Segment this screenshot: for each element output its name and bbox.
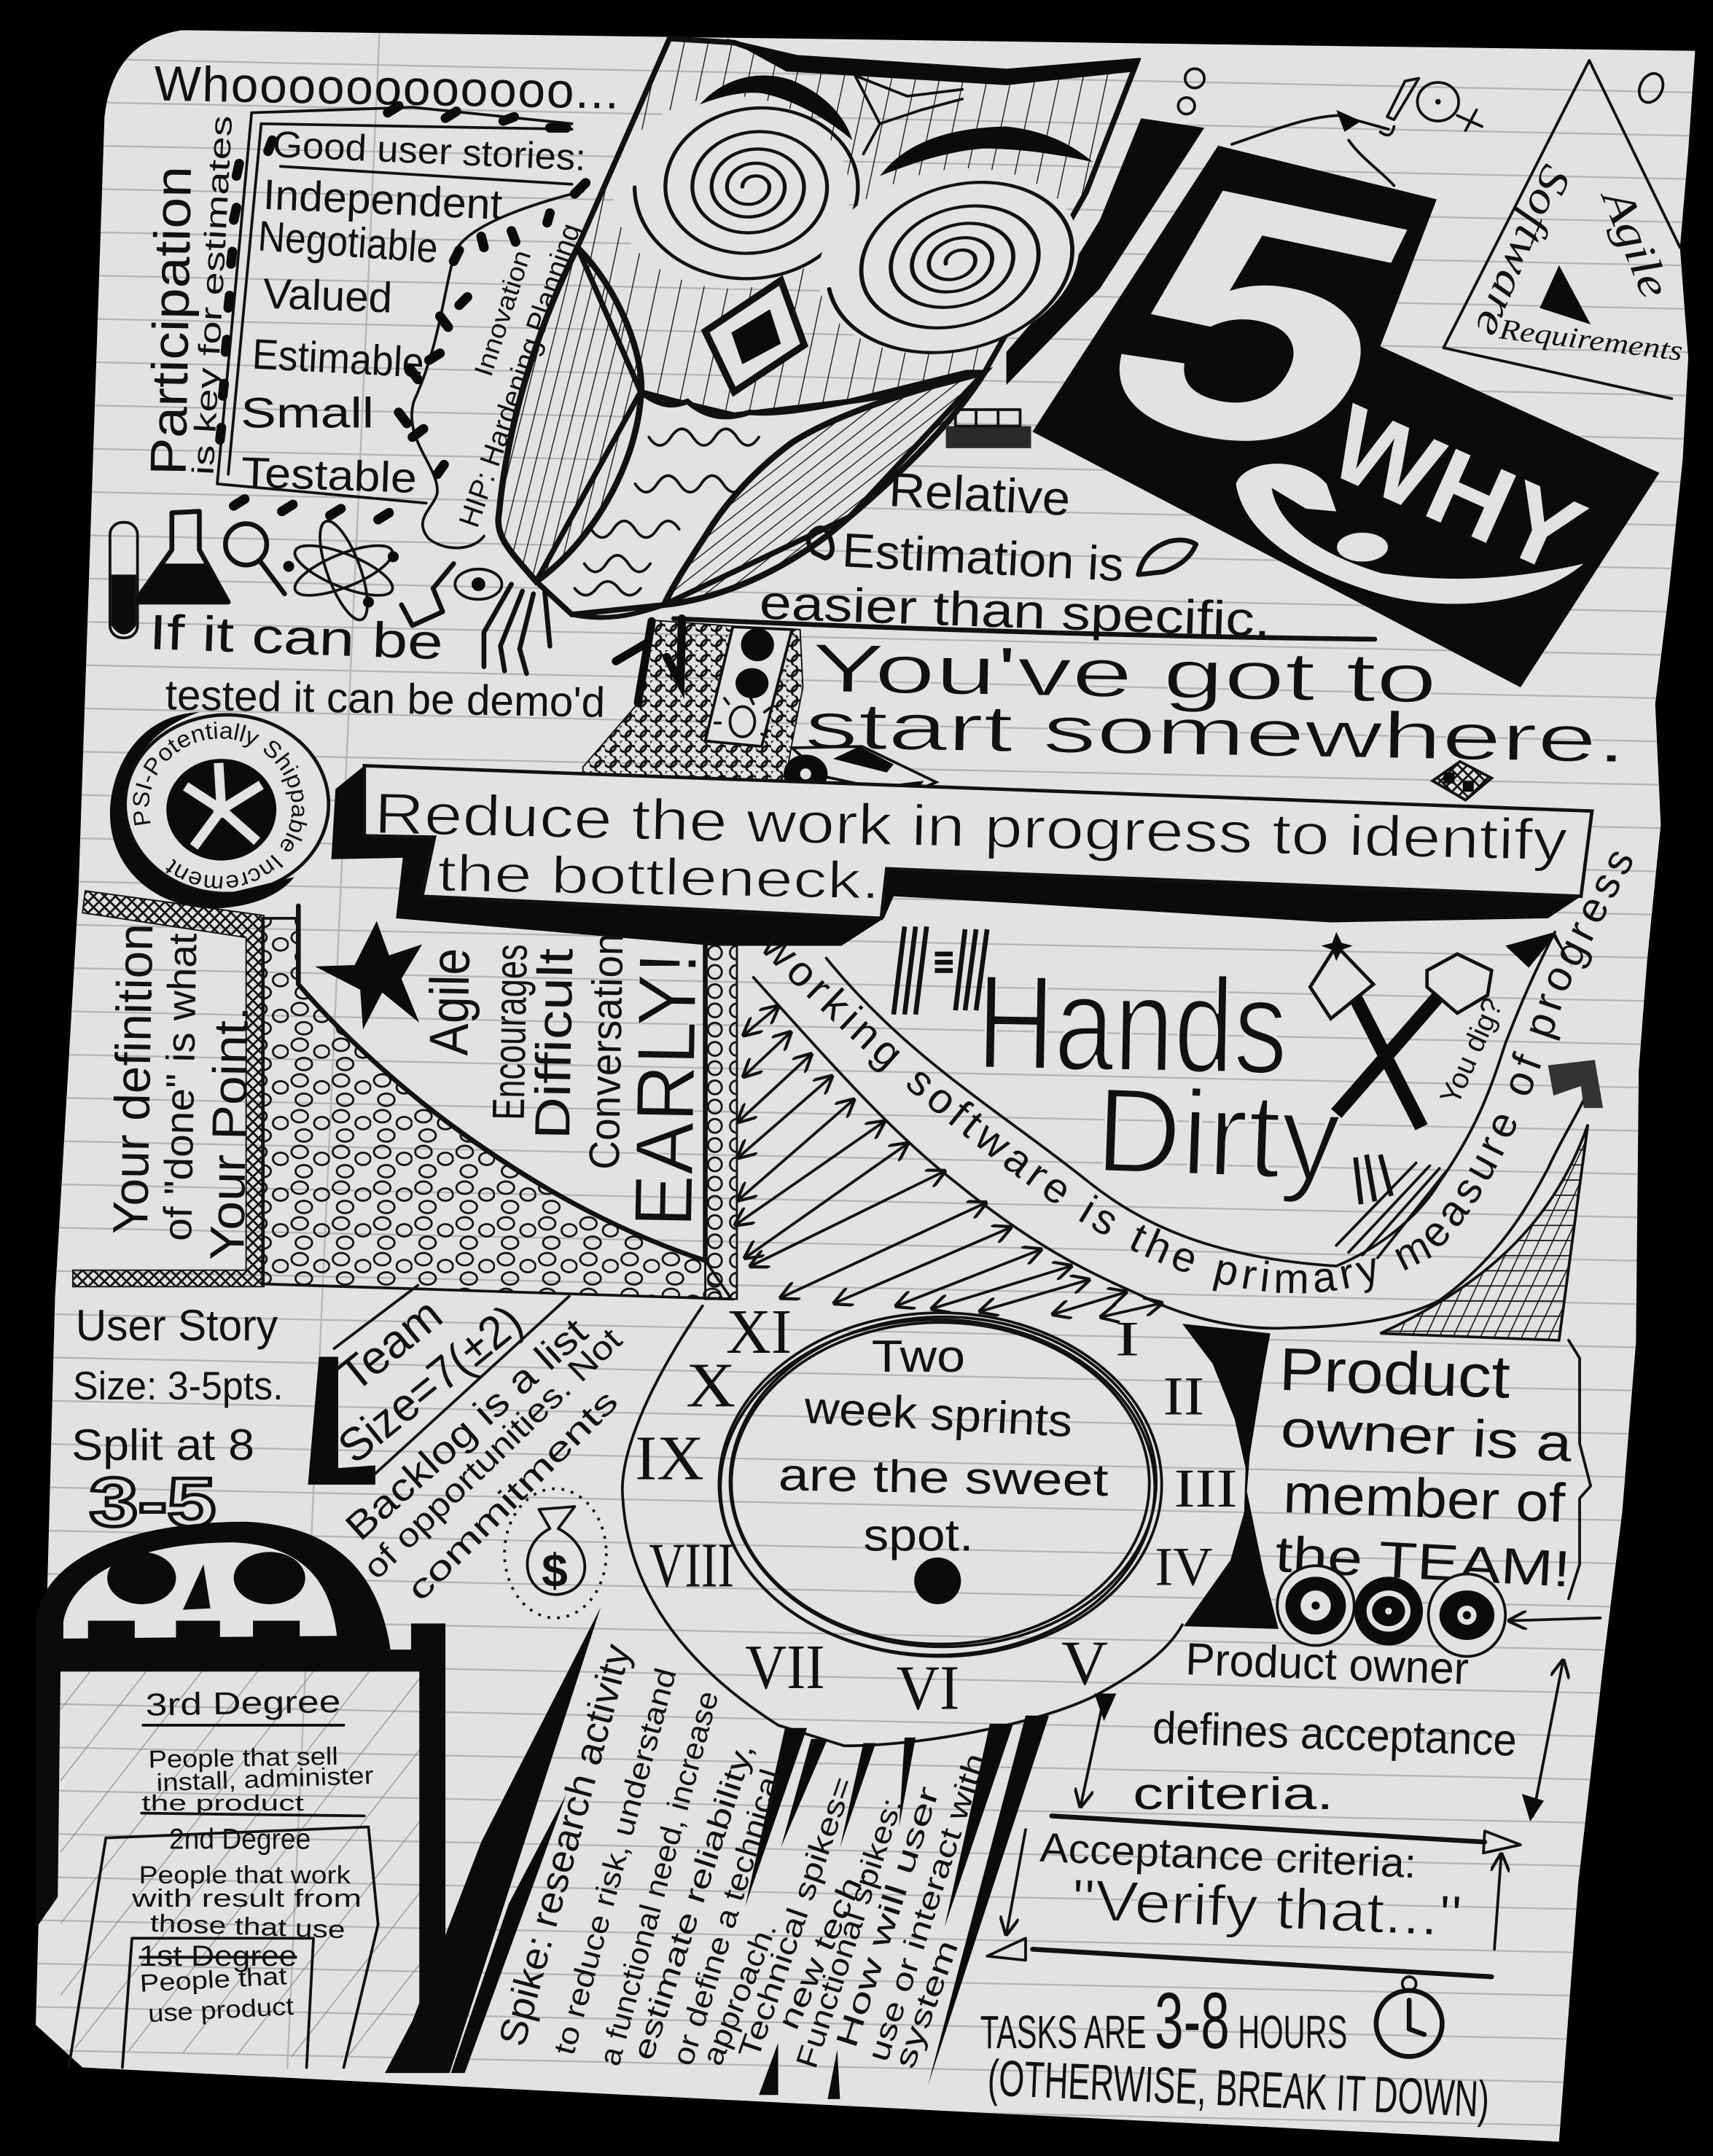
skull teeth bbox=[88, 1621, 135, 1655]
list: INVEST: Small bbox=[241, 390, 374, 437]
roman numerals: IV bbox=[1155, 1537, 1212, 1598]
owl chest bbox=[536, 372, 984, 614]
roman numerals: X bbox=[686, 1350, 735, 1420]
triangle: agile software requirements: Software bbox=[1465, 158, 1581, 344]
black shape bbox=[1032, 146, 1659, 687]
panel: definition of done: Your Point. bbox=[200, 1006, 258, 1261]
white swoosh bbox=[1236, 464, 1584, 604]
tomb walls bbox=[36, 1615, 445, 2045]
arrow head top bbox=[1505, 932, 1573, 968]
banner shadow bbox=[332, 766, 1581, 946]
box: acceptance criteria bbox=[987, 1816, 1521, 1977]
curve lower line bbox=[754, 977, 1585, 1328]
text: backlog: of opportunities. Not bbox=[356, 1321, 629, 1586]
icon: traffic light bbox=[706, 627, 792, 746]
text: hands dirty: Hands bbox=[975, 947, 1289, 1103]
text: product owner defines acceptance: criteria. bbox=[1133, 1769, 1333, 1819]
panel: skull and tombstone degrees: those that use bbox=[149, 1910, 346, 1944]
list: INVEST: Independent bbox=[262, 171, 503, 229]
text: participation is key for estimates: Participation bbox=[140, 165, 202, 476]
clock text bbox=[778, 1332, 1109, 1561]
icon: small clock bbox=[1376, 1977, 1442, 2056]
third degree: 3rd Degree bbox=[145, 1684, 341, 1723]
double headed arrow field bbox=[735, 1007, 1162, 1317]
panel: skull and tombstone degrees: People that work bbox=[139, 1862, 351, 1889]
list: INVEST bbox=[241, 171, 503, 502]
tomb interior hatch bbox=[61, 1671, 421, 2062]
definition of done text: Your definition bbox=[104, 923, 163, 1235]
text: spike definition: or define a technical bbox=[665, 1765, 788, 2069]
clock dot bbox=[914, 1558, 961, 1604]
text: tasks are 3-8 hours: TASKS ARE 3-8 HOURS bbox=[980, 1977, 1347, 2066]
tyre black crescent bbox=[110, 712, 294, 909]
list: INVEST: Estimable bbox=[251, 331, 425, 387]
heading: good user stories: Good user stories: bbox=[272, 123, 587, 179]
panel: skull and tombstone degrees: install, administer bbox=[156, 1762, 374, 1797]
list: INVEST: Negotiable bbox=[257, 212, 440, 272]
text: spike definition: new tech. bbox=[770, 1861, 873, 2034]
text: tasks are 3-8 hours bbox=[980, 1977, 1491, 2128]
text: product owner defines acceptance bbox=[1133, 1634, 1518, 1819]
box: acceptance criteria: Acceptance criteria: bbox=[1039, 1824, 1417, 1886]
owl eyebrows bbox=[700, 76, 852, 140]
text: spike definition: to reduce risk, understand bbox=[547, 1664, 683, 2058]
text: backlog bbox=[337, 1310, 629, 1608]
skull dome bbox=[36, 1522, 391, 1657]
icon: checkered flag bbox=[1432, 762, 1491, 800]
crosshatch border bbox=[73, 891, 264, 1286]
large 5: 5 bbox=[1047, 113, 1472, 528]
small face and toes bbox=[1336, 532, 1389, 562]
vine frame bbox=[217, 107, 572, 503]
owl left eye bbox=[613, 96, 858, 289]
clock text: are the sweet bbox=[778, 1450, 1109, 1506]
text: if it can be tested: If it can be bbox=[148, 605, 444, 670]
curved statement: working software is the primary measure of progress bbox=[763, 851, 1633, 1293]
panel: skull and tombstone degrees: 2nd Degree bbox=[169, 1824, 311, 1856]
text: user story size: Size: 3-5pts. bbox=[73, 1363, 284, 1408]
panel: skull and tombstone degrees: People that sell bbox=[148, 1743, 338, 1773]
roman numerals: II bbox=[1163, 1367, 1204, 1427]
owl beak bbox=[706, 281, 804, 392]
text: user story size: User Story bbox=[76, 1300, 278, 1350]
panel: definition of done: of "done" is what bbox=[155, 933, 206, 1241]
icon: money bag: $ bbox=[542, 1544, 568, 1596]
slanted strokes bbox=[1336, 1163, 1446, 1258]
vine: HIP hardening innovation planning bbox=[399, 183, 587, 548]
label: 3-5 outlined: 3-5 bbox=[90, 1464, 216, 1540]
clock text: Two bbox=[872, 1332, 965, 1382]
vine: HIP hardening innovation planning: HIP: Hardening Planning bbox=[453, 219, 587, 531]
text: spike definition: system bbox=[887, 1935, 964, 2072]
text: backlog: Backlog is a list bbox=[337, 1310, 596, 1549]
text: product owner member: owner is a bbox=[1279, 1399, 1574, 1473]
roman numerals: VIII bbox=[649, 1530, 734, 1600]
text: participation is key for estimates: is key for estimates bbox=[185, 114, 238, 476]
text: if it can be tested: tested it can be demo'd bbox=[165, 671, 606, 727]
text: product owner member: the TEAM! bbox=[1274, 1526, 1572, 1598]
skull eyes and nose bbox=[107, 1552, 176, 1604]
icons: science lab bbox=[110, 512, 399, 638]
roman numerals: V bbox=[1061, 1628, 1108, 1698]
owl left wing bbox=[499, 247, 641, 582]
owl right talon bbox=[616, 619, 682, 703]
divider column of bubbles bbox=[706, 945, 737, 1299]
text: relative estimation bbox=[759, 462, 1271, 647]
panel: agile encourages difficult conversation: Encourages bbox=[484, 944, 537, 1120]
clock inner ring bbox=[719, 1313, 1162, 1657]
text: relative estimation: Estimation is bbox=[841, 523, 1125, 591]
arrow head lower bbox=[1548, 1060, 1603, 1108]
vine: HIP hardening innovation planning: Innovation bbox=[469, 246, 536, 380]
text: spike definition: Technical spikes= bbox=[731, 1772, 860, 2063]
text: hands dirty: Dirty bbox=[1093, 1063, 1343, 1206]
panel: definition of done bbox=[73, 891, 264, 1286]
text: spike definition: use or interact with bbox=[860, 1749, 992, 2066]
scribble column bbox=[583, 620, 803, 790]
panel: skull and tombstone degrees: People that bbox=[139, 1962, 288, 1998]
panel: working software curve bbox=[733, 851, 1633, 1342]
text: backlog: commitments bbox=[399, 1383, 625, 1608]
text: relative estimation: Relative bbox=[888, 462, 1072, 526]
roman numerals: VII bbox=[745, 1632, 825, 1702]
panel: skull and tombstone degrees: use product bbox=[147, 1993, 294, 2028]
icon: hook and eye bbox=[402, 563, 502, 625]
banner: reduce work in progress bbox=[332, 766, 1592, 946]
panel: skull and tombstone degrees: with result from bbox=[131, 1885, 362, 1913]
owl left talon bbox=[484, 585, 550, 673]
roman numerals: IX bbox=[635, 1423, 704, 1493]
text: relative estimation: easier than specific. bbox=[759, 575, 1271, 647]
arrows around acceptance bbox=[1080, 1660, 1563, 1821]
panel: agile encourages difficult conversation: EARLY! bbox=[617, 951, 714, 1228]
owl feathers bbox=[574, 429, 759, 595]
owl head bbox=[577, 39, 1137, 415]
icon: targets bbox=[1277, 1566, 1600, 1657]
text: spike definition: approach. bbox=[695, 1917, 783, 2070]
clock text: spot. bbox=[863, 1510, 973, 1561]
icon: crossed shovels: You dig? bbox=[1434, 993, 1509, 1109]
icon: money bag bbox=[504, 1489, 606, 1618]
text: product owner defines acceptance: Product owner bbox=[1185, 1634, 1470, 1695]
conversation text: Agile bbox=[418, 948, 481, 1056]
hatched triangle bbox=[1381, 1125, 1588, 1340]
panel: team size: Size=7(±2) bbox=[328, 1294, 532, 1473]
roman numerals: III bbox=[1174, 1458, 1237, 1519]
text: spike definition bbox=[491, 1639, 992, 2072]
black spikes bbox=[385, 1607, 1049, 2099]
icon: star bbox=[315, 921, 422, 1030]
hourglass bbox=[1182, 1324, 1279, 1629]
list: INVEST: Testable bbox=[241, 449, 418, 502]
icon: crossed shovels bbox=[1310, 932, 1509, 1128]
owl body bottom bbox=[536, 582, 664, 617]
icon: PSI tyre: PSI-Potentially Shippable Increment bbox=[133, 722, 308, 889]
text: spike definition: How will user bbox=[829, 1782, 945, 2052]
tally marks bbox=[894, 926, 1392, 1204]
vine box: good user stories bbox=[217, 106, 587, 520]
bomb fuse bbox=[1178, 69, 1482, 186]
triangle: agile software requirements bbox=[1443, 60, 1685, 399]
owl bbox=[484, 39, 1204, 673]
text: product owner member: Product bbox=[1278, 1335, 1511, 1411]
clock: two week sprints bbox=[623, 1297, 1237, 1746]
owl right wing bbox=[664, 372, 984, 605]
text: spike definition: Spike: research activity bbox=[491, 1639, 639, 2050]
panel: team size: Team bbox=[328, 1287, 452, 1402]
text: product owner member bbox=[1274, 1335, 1591, 1598]
text: participation is key for estimates bbox=[140, 114, 238, 476]
first degree box bbox=[122, 1938, 313, 2068]
list: INVEST: Valued bbox=[262, 270, 393, 322]
banner text: Reduce the work in progress to identify bbox=[374, 781, 1569, 872]
owl chevron bbox=[855, 76, 962, 154]
triangle: agile software requirements: Agile bbox=[1591, 179, 1679, 305]
icon: racing car bbox=[784, 746, 936, 794]
text: you've got to start somewhere bbox=[804, 630, 1627, 777]
title: Whooo: Whoooooooooooo... bbox=[154, 57, 620, 120]
small structure on wing bbox=[946, 410, 1031, 448]
text: spike definition: estimate reliability, bbox=[625, 1738, 760, 2064]
text: spike definition: a functional need, increase bbox=[592, 1687, 725, 2069]
scribble divider line bbox=[674, 619, 1375, 639]
triangle mark bbox=[1540, 265, 1591, 324]
second degree box bbox=[69, 1813, 378, 2068]
pebble slope bbox=[262, 918, 731, 1299]
panel: 5 WHY bbox=[1032, 113, 1659, 687]
text: hands dirty bbox=[894, 926, 1392, 1206]
text: product owner member: member of bbox=[1282, 1463, 1567, 1534]
panel: agile encourages difficult conversation: Difficult bbox=[526, 948, 583, 1140]
banner: reduce work in progress: the bottleneck. bbox=[437, 844, 881, 910]
panel: skull and tombstone degrees bbox=[36, 1522, 445, 2068]
panel: skull and tombstone degrees: the product bbox=[141, 1792, 305, 1816]
owl outer band bbox=[1007, 118, 1204, 385]
text: user story size: Split at 8 bbox=[71, 1420, 254, 1469]
owl right eye bbox=[800, 145, 1096, 378]
WHY lettering: WHY bbox=[1313, 382, 1600, 598]
roman numerals: VI bbox=[897, 1652, 959, 1722]
text: product owner defines acceptance: defines acceptance bbox=[1152, 1703, 1518, 1766]
triangle: agile software requirements: Requirements bbox=[1497, 313, 1685, 367]
roman numerals bbox=[635, 1297, 1237, 1722]
clock text: week sprints bbox=[803, 1383, 1074, 1447]
panel: agile encourages difficult conversation bbox=[262, 906, 731, 1299]
text: you've got to start somewhere: start somewhere. bbox=[804, 689, 1627, 777]
banner face bbox=[364, 766, 1592, 918]
roman numerals: I bbox=[1115, 1312, 1140, 1367]
clock outer ring bbox=[623, 1306, 1182, 1746]
text: you've got to start somewhere: You've got to bbox=[811, 630, 1437, 717]
text: if it can be tested bbox=[148, 605, 606, 727]
curve upper line bbox=[827, 932, 1555, 1266]
wheel hub bbox=[166, 759, 276, 861]
roman numerals: XI bbox=[726, 1297, 792, 1367]
text: spike definition: Functional spikes: bbox=[789, 1794, 908, 2072]
owl top edge bbox=[726, 39, 1141, 85]
panel: agile encourages difficult conversation: Conversation bbox=[581, 933, 632, 1170]
box: acceptance criteria: "Verify that..." bbox=[1070, 1867, 1463, 1948]
panel: skull and tombstone degrees: 1st Degree bbox=[139, 1940, 297, 1972]
text: user story size bbox=[71, 1300, 284, 1469]
